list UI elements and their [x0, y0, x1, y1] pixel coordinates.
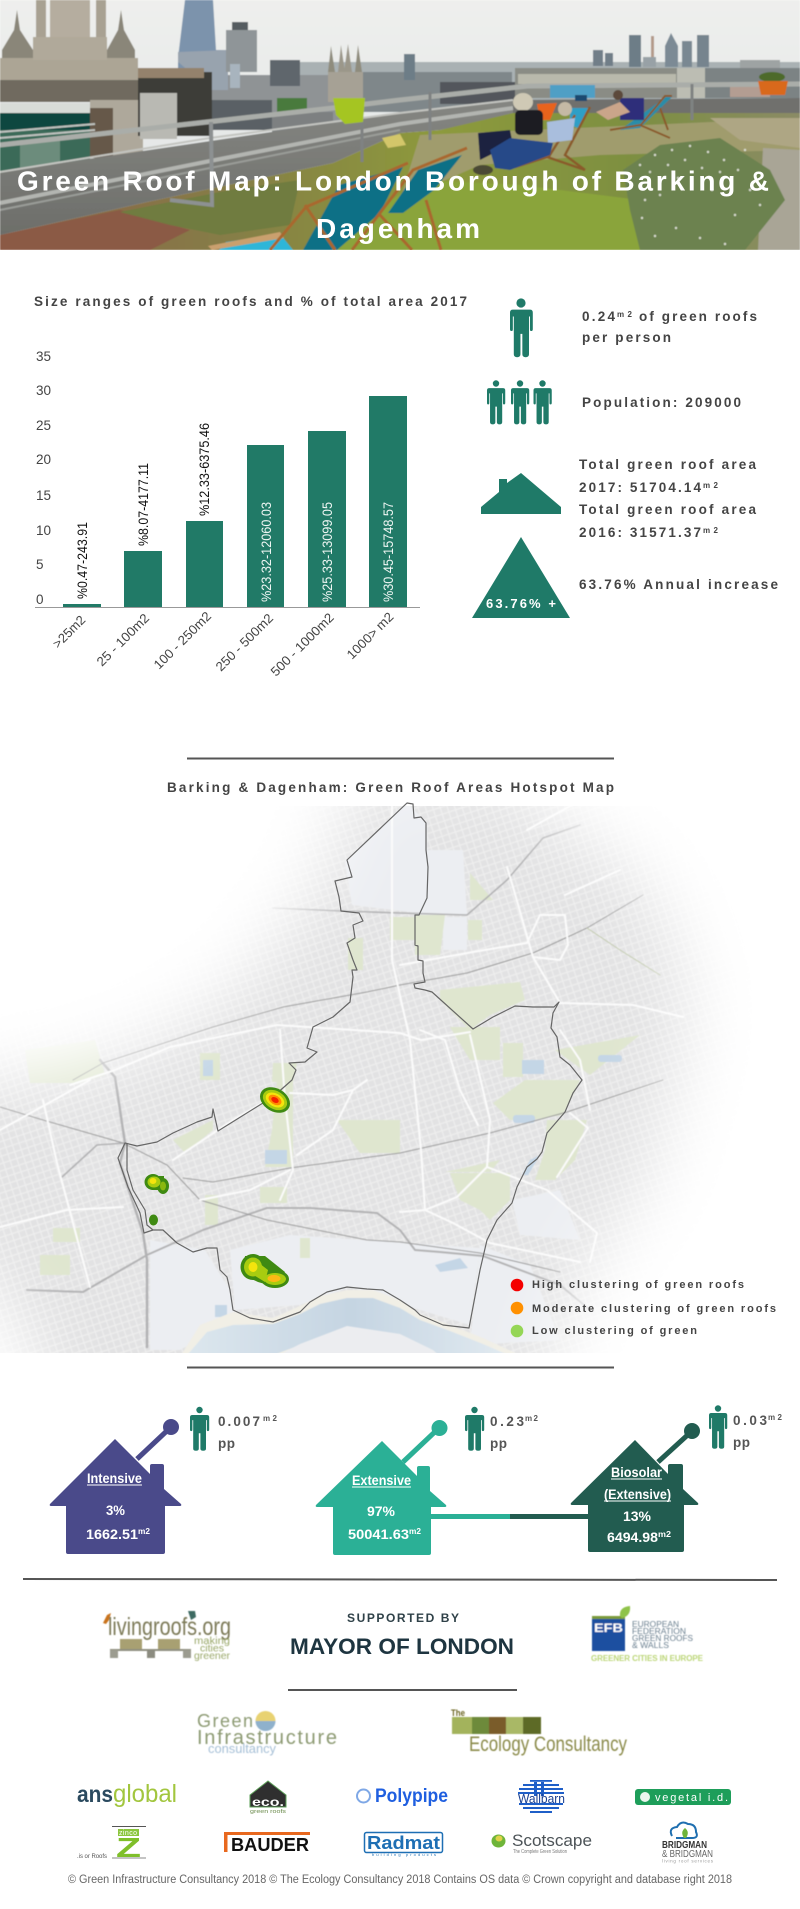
house: biosolar: m2: [658, 1530, 672, 1539]
logo: wallbarn: [518, 1780, 565, 1813]
logo: supported by mayor of london: [290, 1611, 514, 1659]
logo: radmat: [364, 1832, 442, 1857]
logo: wallbarn: Wallbarn: [518, 1791, 565, 1806]
stat: annual increase: 63.76% Annual increase: [579, 577, 778, 592]
per person: biosolar: m2: [768, 1413, 783, 1422]
river thames: [184, 1290, 513, 1353]
orange planter: [758, 72, 788, 95]
logo: eco green roofs: [250, 1781, 287, 1815]
logo: european federation of green roofs and walls: EUROPEAN: [632, 1620, 679, 1629]
logo: green infrastructure consultancy: Infrastructure: [197, 1727, 337, 1749]
x axis labels: 500 - 1000m2: [268, 610, 337, 679]
per person: extensive: 0.23: [490, 1414, 524, 1429]
bars: [63, 396, 407, 608]
logo: ansglobal: [77, 1780, 177, 1808]
logo: livingroofs.org: cities: [200, 1644, 224, 1654]
per person: intensive: pp: [218, 1436, 235, 1451]
logo: scotscape: Scotscape: [512, 1831, 592, 1850]
ground: [0, 110, 800, 250]
per person: biosolar: [709, 1405, 783, 1450]
stat: total green roof area: m2: [703, 526, 719, 535]
per person: intensive: m2: [263, 1414, 278, 1423]
stat: total green roof area: Total green roof area: [579, 502, 756, 517]
seated people and deck chairs: [473, 90, 672, 175]
bar value labels: %0.47-243.91: [74, 522, 90, 599]
logo: green infrastructure consultancy: [197, 1711, 337, 1756]
logo: livingroofs.org: making: [194, 1636, 230, 1647]
logo: ansglobal: global: [113, 1780, 177, 1808]
y axis labels: 0: [36, 592, 44, 607]
parapet wall and railings: [0, 84, 800, 235]
logo: european federation of green roofs and walls: EFB: [594, 1621, 623, 1635]
x axis labels: 1000> m2: [344, 609, 397, 662]
logo: eco green roofs: green roofs: [250, 1809, 287, 1815]
y axis labels: 15: [36, 488, 51, 503]
logo: zinco: [77, 1826, 146, 1863]
yellow sign: [382, 134, 406, 148]
house: intensive: Intensive: [87, 1470, 142, 1486]
house: intensive: [50, 1419, 181, 1554]
logo: bridgman and bridgman: & BRIDGMAN: [662, 1849, 713, 1860]
logo: european federation of green roofs and walls: GREEN ROOFS: [632, 1634, 693, 1643]
logo: green infrastructure consultancy: Green: [197, 1711, 253, 1731]
per person: biosolar: pp: [733, 1435, 750, 1450]
logo: vegetal i.d.: [635, 1789, 731, 1805]
house: biosolar: 13%: [623, 1508, 652, 1524]
logo: livingroofs.org: [103, 1611, 231, 1662]
title: [17, 166, 769, 244]
hotspot map: [0, 802, 776, 1353]
x axis labels: >25m2: [50, 612, 88, 651]
hotspot: south: [240, 1254, 289, 1288]
logo: green infrastructure consultancy: consultancy: [208, 1741, 276, 1756]
house: intensive: 3%: [106, 1502, 126, 1518]
footer copyright: © Green Infrastructure Consultancy 2018 © The Ecology Consultancy 2018 Contains OS data © Crown copyright and database right 2018: [68, 1874, 732, 1886]
icon: single person: [510, 298, 533, 357]
bar value labels: %8.07-4177.11: [135, 463, 151, 546]
y axis labels: 20: [36, 452, 51, 467]
stat: total green roof area: Total green roof area: [579, 457, 756, 472]
house: biosolar: Biosolar: [611, 1464, 663, 1480]
house: biosolar: (Extensive): [604, 1486, 671, 1502]
bar value labels: %12.33-6375.46: [196, 423, 212, 516]
logo: the ecology consultancy: [451, 1708, 627, 1756]
icon: triangle with increase: [472, 537, 570, 618]
per person: biosolar: 0.03: [733, 1413, 767, 1428]
logo: the ecology consultancy: The: [451, 1708, 465, 1718]
stat: total green roof area: 2017: 51704.14: [579, 480, 701, 495]
shard and towers: [178, 0, 300, 90]
connector between extensive and biosolar: [431, 1514, 588, 1519]
house: extensive: Extensive: [352, 1472, 411, 1488]
logo: vegetal i.d.: vegetal i.d.: [655, 1792, 728, 1804]
map legend: Low clustering of green: [532, 1325, 697, 1337]
icon: triangle with increase: 63.76% +: [486, 596, 556, 611]
logo: supported by mayor of london: SUPPORTED BY: [347, 1611, 459, 1625]
logo: the ecology consultancy: Ecology Consultancy: [469, 1733, 627, 1756]
x axis labels: 25 - 100m2: [94, 610, 152, 669]
logo: zinco: zinco: [119, 1830, 137, 1837]
map legend: [511, 1279, 776, 1337]
logo: european federation of green roofs and walls: FEDERATION: [632, 1627, 686, 1636]
bar chart: size ranges of green roofs: [35, 349, 420, 679]
mid-rise buildings: [138, 68, 333, 139]
front deck chairs: [208, 148, 467, 250]
lime green planter: [333, 98, 365, 124]
hotspot: barking centre: [144, 1174, 169, 1194]
map legend: High clustering of green roofs: [532, 1279, 744, 1291]
logo: bridgman and bridgman: BRIDGMAN: [662, 1840, 707, 1851]
map legend: Moderate clustering of green roofs: [532, 1303, 776, 1315]
water: [203, 1055, 622, 1317]
per person: intensive: [190, 1407, 278, 1451]
house: extensive: m2: [409, 1527, 422, 1536]
stat: green roofs per person: 0.24: [582, 309, 615, 324]
icon: three people: [487, 380, 552, 424]
bar chart: size ranges of green roofs: %23.32-12060.03: [258, 502, 274, 602]
bar chart: size ranges of green roofs: %25.33-13099.05: [319, 502, 335, 602]
per person: intensive: 0.007: [218, 1414, 260, 1429]
grey trunk roads and rail: [0, 825, 663, 1347]
bar chart: size ranges of green roofs: %30.45-15748.57: [380, 502, 396, 602]
stat: population: Population: 209000: [582, 395, 741, 410]
grey building and parapet on right: [440, 68, 800, 104]
logo: european federation of green roofs and walls: [591, 1606, 704, 1663]
logo: eco green roofs: eco.: [252, 1795, 284, 1809]
logo: scotscape: [492, 1831, 592, 1855]
icon: house: [481, 473, 561, 514]
stat: green roofs per person: of green roofs: [639, 309, 757, 324]
logo: polypipe: Polypipe: [375, 1786, 448, 1807]
x axis labels: 100 - 250m2: [151, 608, 214, 672]
y axis labels: 5: [36, 557, 44, 572]
borough boundary: [118, 803, 582, 1328]
second church: [328, 44, 363, 102]
y axis labels: 35: [36, 349, 51, 364]
y axis labels: [36, 349, 51, 607]
stat: green roofs per person: m2: [617, 310, 633, 319]
y axis labels: 10: [36, 523, 51, 538]
logo: livingroofs.org: livingroofs.org: [108, 1613, 231, 1641]
stat: total green roof area: 2016: 31571.37: [579, 525, 701, 540]
logo: zinco: Z: [116, 1832, 141, 1863]
per person: extensive: [465, 1407, 539, 1451]
house: intensive: 1662.51: [86, 1526, 138, 1542]
y axis labels: 30: [36, 383, 51, 398]
per person: extensive: pp: [490, 1436, 507, 1451]
logo: european federation of green roofs and walls: GREENER CITIES IN EUROPE: [591, 1654, 704, 1663]
house: extensive: [316, 1420, 448, 1555]
hotspot: north: [255, 1082, 295, 1118]
stat: total green roof area: m2: [703, 481, 719, 490]
main white roads: [0, 795, 683, 1287]
hotspot: small: [149, 1214, 158, 1226]
x axis labels: 250 - 500m2: [213, 610, 276, 674]
house: biosolar: 6494.98: [607, 1529, 658, 1545]
light non-residential areas: [150, 803, 580, 1350]
blue sign: [550, 85, 595, 98]
basemap: [0, 806, 704, 1353]
logo: bridgman and bridgman: [662, 1823, 714, 1864]
per person: extensive: m2: [525, 1414, 539, 1423]
parks: [25, 873, 640, 1275]
historic building on left: [0, 0, 143, 172]
y axis labels: 25: [36, 418, 51, 433]
logo: supported by mayor of london: MAYOR OF LONDON: [290, 1634, 514, 1659]
x axis labels: [50, 608, 397, 679]
logo: zinco: .is or Roofs: [77, 1854, 107, 1860]
bar chart heading: Size ranges of green roofs and % of total area 2017: [34, 294, 467, 309]
house: extensive: 50041.63: [348, 1526, 409, 1542]
title: Dagenham: [316, 213, 480, 244]
map heading: Barking & Dagenham: Green Roof Areas Hotspot Map: [167, 780, 614, 795]
bar value labels: [74, 423, 212, 599]
distant skyline haze: [212, 33, 800, 130]
house: biosolar: [571, 1423, 700, 1552]
meadow planting with flowers: [623, 138, 785, 250]
logo: livingroofs.org: greener: [194, 1651, 231, 1662]
house: intensive: m2: [138, 1527, 151, 1536]
logo: bridgman and bridgman: living roof services: [662, 1858, 714, 1864]
logo: radmat: Radmat: [367, 1833, 440, 1853]
hotspots: [144, 1082, 295, 1288]
title: Green Roof Map: London Borough of Barking &: [17, 166, 769, 196]
stat: total green roof area: [579, 457, 756, 540]
logo: bauder: BAUDER: [231, 1835, 309, 1855]
logo: radmat: building products: [372, 1852, 436, 1857]
logo: ansglobal: ans: [77, 1781, 113, 1807]
stat: green roofs per person: [582, 309, 757, 345]
logo: european federation of green roofs and walls: & WALLS: [632, 1641, 669, 1650]
logo: scotscape: The Complete Green Solution: [513, 1849, 567, 1855]
stat: green roofs per person: per person: [582, 330, 671, 345]
house: extensive: 97%: [367, 1503, 396, 1519]
header photo: rooftop meadow with deck chairs: [0, 0, 800, 250]
